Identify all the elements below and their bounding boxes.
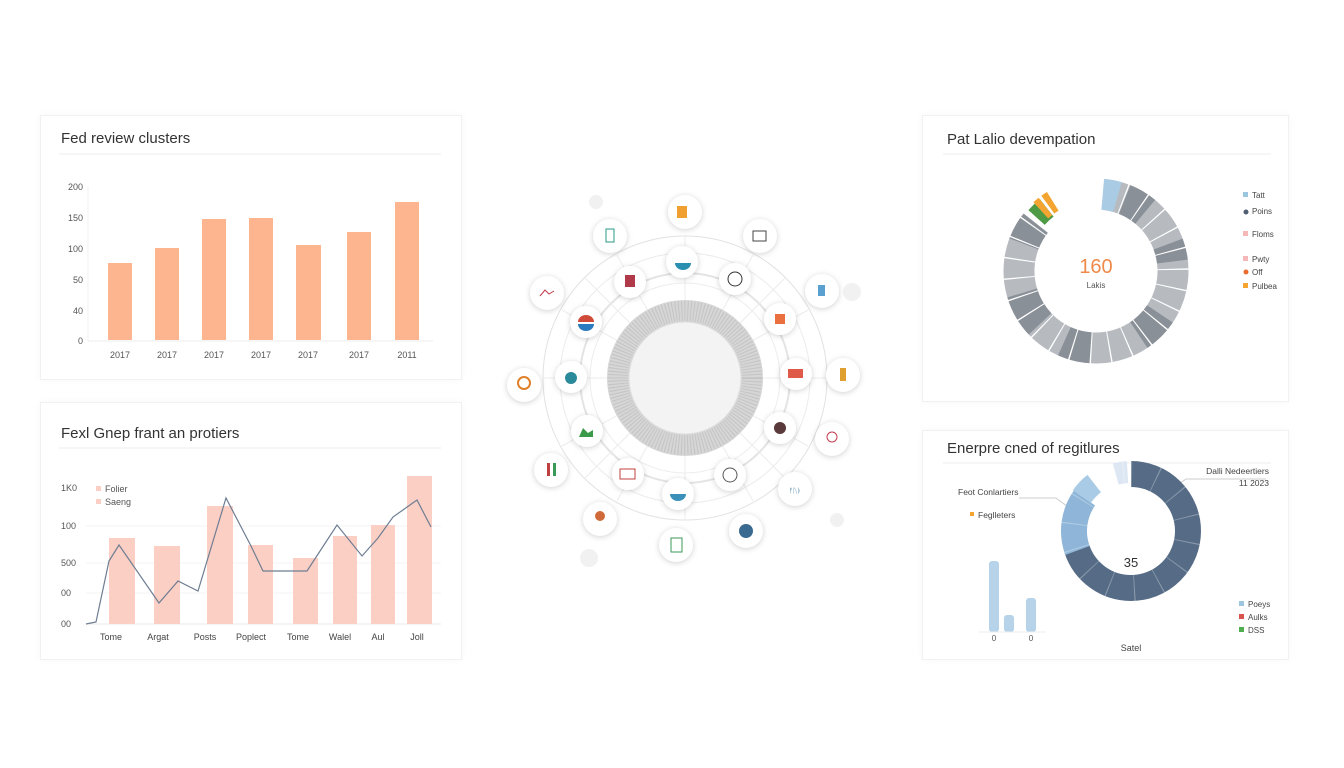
central radial diagram: ᚠᚢᚦ: [789, 487, 801, 495]
bar chart: 40: [73, 306, 83, 316]
donut chart: 160: [1079, 256, 1113, 278]
legend: Saeng: [105, 497, 131, 507]
legend: Floms: [1252, 230, 1274, 239]
panel: fed review clusters: [40, 115, 462, 380]
legend: [1243, 191, 1277, 291]
legend: Poeys: [1248, 600, 1270, 609]
donut chart: Satel: [1121, 643, 1141, 653]
legend: [96, 484, 131, 507]
combo chart: [61, 476, 441, 642]
combo chart: Argat: [147, 632, 169, 642]
bar chart: 2011: [397, 350, 417, 360]
callouts: [958, 466, 1269, 520]
combo chart: 100: [61, 521, 76, 531]
gray ring: [618, 311, 752, 445]
combo chart: 00: [61, 619, 71, 629]
heading: Enerpre cned of regitlures: [947, 440, 1120, 457]
bar chart: [68, 182, 433, 360]
combo chart: 500: [61, 558, 76, 568]
bar chart: 100: [68, 244, 83, 254]
combo chart: Tome: [100, 632, 122, 642]
callouts: 11 2023: [1239, 478, 1269, 488]
panel: growth chart: [40, 402, 462, 660]
legend: Pulbea: [1252, 282, 1277, 291]
icon nodes: [508, 196, 859, 561]
bar chart: 2017: [110, 350, 130, 360]
combo chart: Posts: [194, 632, 217, 642]
combo chart: Joll: [410, 632, 424, 642]
bar chart: 200: [68, 182, 83, 192]
combo chart: Tome: [287, 632, 309, 642]
donut chart: [1047, 447, 1215, 653]
heading: Fed review clusters: [61, 130, 190, 147]
bar chart: 2017: [349, 350, 369, 360]
bar chart: 2017: [157, 350, 177, 360]
combo chart: Aul: [371, 632, 385, 642]
legend: Poins: [1252, 207, 1272, 216]
bar chart: 150: [68, 213, 83, 223]
bar chart: 50: [73, 275, 83, 285]
combo chart: Walel: [329, 632, 351, 642]
legend: Folier: [105, 484, 128, 494]
combo chart: 1K0: [61, 483, 77, 493]
legend: Off: [1252, 268, 1263, 277]
callouts: Feot Conlartiers: [958, 487, 1018, 497]
panel: donut 35: [922, 430, 1289, 660]
bar chart: 2017: [204, 350, 224, 360]
legend: Aulks: [1248, 613, 1268, 622]
legend: Pwty: [1252, 255, 1269, 264]
legend: Tatt: [1252, 191, 1266, 200]
callouts: Feglleters: [978, 510, 1015, 520]
bar chart: 0: [78, 336, 83, 346]
heading: Pat Lalio devempation: [947, 131, 1095, 148]
panel: donut 35: 0: [1029, 634, 1034, 643]
central radial diagram: [504, 194, 862, 567]
combo chart: Poplect: [236, 632, 267, 642]
panel: donut 35: 0: [992, 634, 997, 643]
donut chart: 35: [1124, 555, 1138, 570]
combo chart: 00: [61, 588, 71, 598]
callouts: Dalli Nedeertiers: [1206, 466, 1269, 476]
mini bars: [989, 561, 1036, 632]
bar chart: 2017: [251, 350, 271, 360]
bar chart: 2017: [298, 350, 318, 360]
legend: DSS: [1248, 626, 1264, 635]
donut chart: [981, 156, 1211, 386]
donut chart: Lakis: [1087, 281, 1105, 290]
panel: donut 160: [922, 115, 1289, 402]
heading: Fexl Gnep frant an protiers: [61, 425, 239, 442]
legend: [1239, 600, 1270, 635]
